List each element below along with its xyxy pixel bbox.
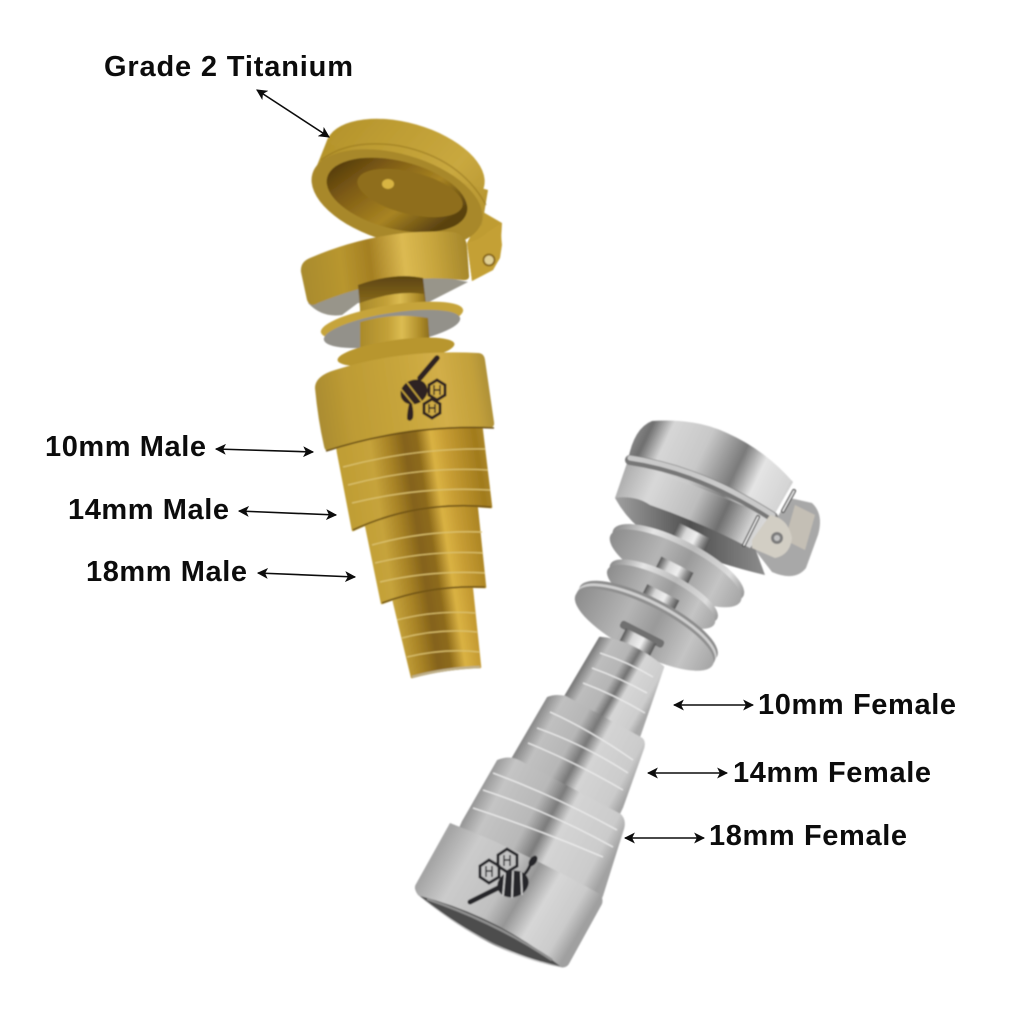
gold collar [315,352,494,451]
honey dipper logo, gold [396,358,445,421]
disc 1 [600,509,754,622]
silver cap lower body [615,460,773,548]
arrow: 14mm Female [648,772,727,774]
gold flange [336,332,456,372]
gold cup underside [308,268,468,316]
gold stage 18mm [392,578,480,677]
arrow: 10mm Female [674,704,753,706]
silver stage 14mm [503,696,644,828]
silver cap top [628,420,793,517]
label: 10mm Female: 10mm Female [758,689,956,721]
neck to cap [660,523,711,576]
arrow: 18mm Male [258,573,355,577]
arrow: 14mm Male [239,511,336,515]
gold stage 10mm [336,415,491,530]
silver hinge plate [752,515,792,558]
silver discs and necks [564,496,763,687]
honey dipper logo, silver [470,849,539,902]
label: 14mm Male: 14mm Male [68,494,229,526]
neck 2 [632,584,679,631]
threaded disc 3 [565,565,728,686]
gold hinge back [467,212,502,281]
silver collar [415,823,602,967]
gold lower neck [360,316,430,356]
label: Grade 2 Titanium: Grade 2 Titanium [104,51,353,83]
gold titanium nail [300,102,502,677]
silver stage 18mm [455,759,624,912]
arrow: 10mm Male [216,449,313,452]
gold disc [318,294,466,356]
neck 1 [647,557,693,601]
label: 10mm Male: 10mm Male [45,431,206,463]
silver stage 10mm [555,638,663,757]
label: 18mm Female: 18mm Female [709,820,907,852]
label: 18mm Male: 18mm Male [86,556,247,588]
gold cup [301,232,469,305]
arrow: 18mm Female [625,837,704,839]
silver titanium nail [415,420,820,967]
label: 14mm Female: 14mm Female [733,757,931,789]
gold hinge plate [467,224,502,281]
gold neck [358,276,427,326]
disc 2 [599,547,726,641]
silver clips [744,491,794,545]
silver cap band [630,460,773,517]
gold stage 14mm [364,495,485,603]
gold lid [300,102,495,265]
arrow: Grade 2 Titanium [257,90,329,137]
neck 3 [612,620,665,663]
silver knurled hinge [755,498,820,576]
silver cap underside [615,480,765,575]
